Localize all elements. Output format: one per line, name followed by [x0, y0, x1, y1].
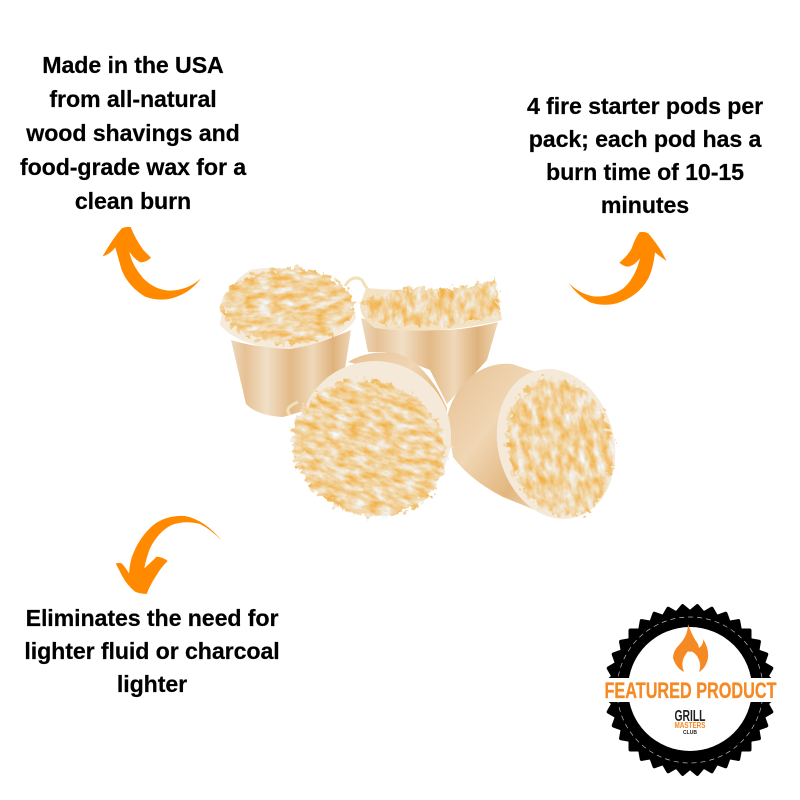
pod: back left	[220, 268, 370, 417]
text: made in the USA: wood shavings and	[26, 120, 240, 146]
text: pods per pack: burn time of 10-15	[546, 159, 744, 185]
text: pods per pack: 4 fire starter pods per	[527, 93, 763, 119]
logo: grill masters club	[674, 708, 706, 736]
pod: front left	[273, 352, 465, 538]
icon: flame	[673, 624, 708, 672]
text: made in the USA: Made in the USA	[42, 52, 224, 78]
logo: grill masters club: MASTERS	[674, 721, 706, 730]
text: pods per pack: pack; each pod has a	[529, 126, 761, 152]
logo: grill masters club: GRILL	[674, 708, 706, 725]
arrow: top right pointing up	[568, 232, 667, 305]
text: eliminates lighter fluid: lighter fluid or charcoal	[24, 638, 280, 664]
pod: back right	[360, 278, 502, 404]
badge: scalloped black seal	[603, 603, 777, 777]
text: made in the USA: food-grade wax for a	[20, 154, 246, 180]
product photo: four fire starter pods	[220, 268, 631, 538]
text: eliminates lighter fluid: lighter	[117, 671, 187, 697]
text: pods per pack: minutes	[601, 192, 689, 218]
text: pods per pack	[527, 93, 763, 218]
text: made in the USA	[20, 52, 246, 214]
text: eliminates lighter fluid: Eliminates the need for	[26, 605, 278, 631]
pod: front right	[447, 356, 631, 532]
logo: grill masters club: CLUB	[683, 730, 697, 736]
text: eliminates lighter fluid	[24, 605, 280, 698]
text: made in the USA: from all-natural	[49, 86, 217, 112]
arrow: top left pointing up	[103, 227, 201, 300]
arrow: bottom left pointing down	[116, 516, 222, 594]
text: made in the USA: clean burn	[75, 188, 191, 214]
featured product badge	[600, 603, 780, 777]
